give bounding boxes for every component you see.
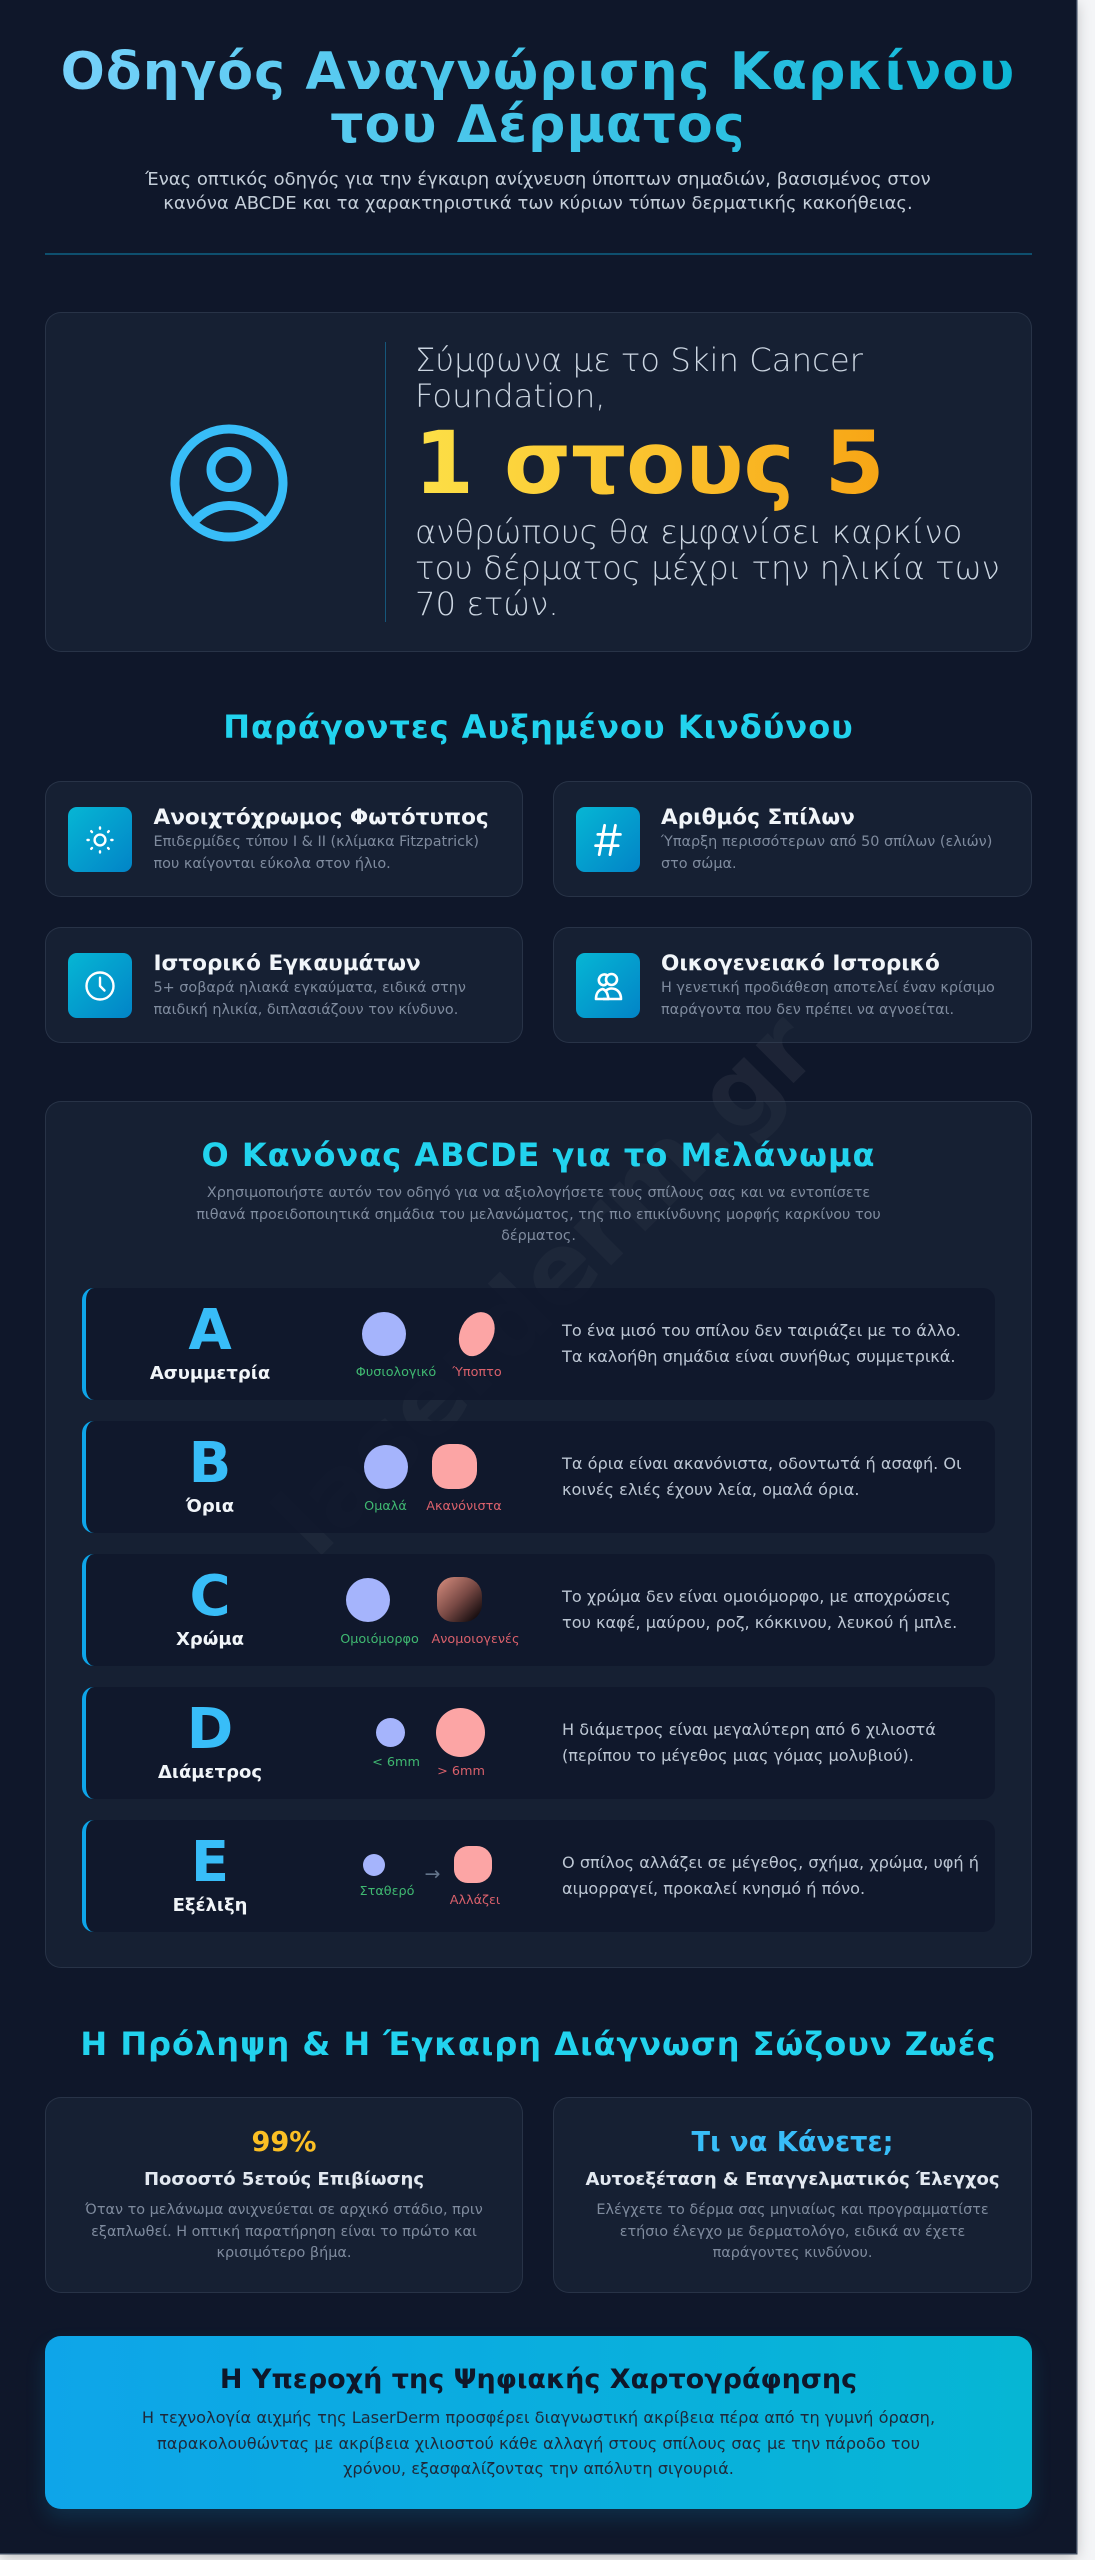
description: Τα καλοήθη σημάδια είναι συνήθως συμμετρικά. [562, 1347, 956, 1366]
hero number: 1 στους 5 [414, 414, 885, 514]
row: B border [82, 1421, 994, 1533]
title [0, 46, 1076, 152]
card title: Ανοιχτόχρωμος Φωτότυπος [154, 805, 489, 830]
card text: ετήσιο έλεγχο με δερματολόγο, ειδικά αν έχετε [620, 2224, 965, 2240]
card text [660, 834, 992, 872]
callout title: Η Υπεροχή της Ψηφιακής Χαρτογράφησης [220, 2364, 857, 2395]
subtitle: Ένας οπτικός οδηγός για την έγκαιρη ανίχνευση ύποπτων σημαδιών, βασισμένος στον [145, 169, 931, 190]
legend irregular: Ακανόνιστα [426, 1499, 502, 1514]
hero closing text: του δέρματος μέχρι την ηλικία των [415, 549, 1000, 587]
label: Χρώμα [176, 1629, 244, 1650]
normal mole [362, 1312, 406, 1356]
letter B: B [189, 1431, 231, 1496]
description [562, 1853, 979, 1898]
legend changing: Αλλάζει [450, 1893, 500, 1908]
changing mole [454, 1846, 492, 1883]
heading: ABCDE: Ο Κανόνας ABCDE για το Μελάνωμα [202, 1136, 875, 1174]
icon: people [576, 953, 640, 1018]
card text: Η γενετική προδιάθεση αποτελεί έναν κρίσιμο [661, 980, 995, 996]
description [562, 1720, 936, 1765]
description: Το χρώμα δεν είναι ομοιόμορφο, με αποχρώσεις [562, 1587, 951, 1606]
card text [85, 2202, 483, 2261]
title: του Δέρματος [330, 94, 746, 154]
row: A asymmetry [82, 1288, 994, 1400]
panel: risk card moles [553, 781, 1032, 897]
letter C: C [189, 1564, 231, 1629]
hero intro text: Foundation, [415, 377, 606, 415]
uniform mole [346, 1578, 390, 1622]
asymmetric mole [451, 1306, 502, 1361]
card text: κρισιμότερο βήμα. [217, 2245, 351, 2261]
ABCDE intro text [196, 1185, 881, 1244]
callout text: Η τεχνολογία αιχμής της LaserDerm προσφέρει διαγνωστική ακρίβεια πέρα από τη γυμνή όραση, [142, 2408, 935, 2427]
card title: Αριθμός Σπίλων [661, 805, 855, 830]
panel: ABCDE rule [45, 1101, 1032, 1968]
hero closing text: 70 ετών. [415, 585, 559, 623]
description [562, 1321, 961, 1366]
card text: παράγοντα που δεν πρέπει να αγνοείται. [661, 1002, 954, 1018]
callout text: παρακολουθώντας με ακρίβεια χιλιοστού κάθε αλλαγή στους σπίλους σας με την πάροδο του [157, 2434, 920, 2453]
description: του καφέ, μαύρου, ροζ, κόκκινου, λευκού ή μπλε. [562, 1613, 957, 1632]
card text [661, 980, 995, 1018]
letter D: D [187, 1697, 233, 1762]
letter A: A [188, 1298, 232, 1363]
ABCDE intro text: δέρματος. [501, 1228, 576, 1244]
hero intro text: Σύμφωνα με το Skin Cancer [415, 341, 863, 379]
panel: hero statistic [45, 312, 1032, 652]
row: E evolution [82, 1820, 994, 1932]
card text: Επιδερμίδες τύπου I & II (κλίμακα Fitzpatrick) [154, 834, 479, 850]
panel: risk card burns [45, 927, 523, 1043]
callout text [142, 2408, 935, 2478]
card text: στο σώμα. [661, 856, 737, 872]
letter E: E [191, 1830, 229, 1895]
label: Όρια [186, 1496, 234, 1517]
legend small: < 6mm [372, 1755, 420, 1770]
irregular mole [432, 1444, 477, 1489]
description: Τα όρια είναι ακανόνιστα, οδοντωτά ή ασαφή. Οι [562, 1454, 962, 1473]
description: Ο σπίλος αλλάζει σε μέγεθος, σχήμα, χρώμα, υφή ή [562, 1853, 979, 1872]
description: (περίπου το μέγεθος μιας γόμας μολυβιού). [562, 1746, 914, 1765]
subtitle: κανόνα ABCDE και τα χαρακτηριστικά των κύριων τύπων δερματικής κακοήθειας. [163, 193, 913, 214]
card text [596, 2202, 989, 2261]
callout text: χρόνου, εξασφαλίζοντας την απόλυτη σιγουριά. [343, 2459, 734, 2478]
label: Εξέλιξη [173, 1895, 247, 1916]
icon: person in circle [170, 424, 288, 542]
arrow: → [425, 1863, 440, 1885]
card title: Οικογενειακό Ιστορικό [661, 951, 940, 976]
ABCDE intro text: πιθανά προειδοποιητικά σημάδια του μελανώματος, της πιο επικίνδυνης μορφής καρκίνου του [196, 1207, 881, 1223]
card heading: Τι να Κάνετε; [691, 2127, 894, 2158]
small mole [376, 1718, 405, 1747]
icon: sun [68, 807, 132, 872]
card text: εξαπλωθεί. Η οπτική παρατήρηση είναι το πρώτο και [91, 2224, 477, 2240]
panel: survival rate [45, 2097, 523, 2293]
panel: risk card family [553, 927, 1032, 1043]
subtitle [145, 169, 931, 214]
panel: risk card skin type [45, 781, 523, 897]
card text: 5+ σοβαρά ηλιακά εγκαύματα, ειδικά στην [154, 980, 466, 996]
legend stable: Σταθερό [360, 1884, 414, 1899]
heading: prevention: Η Πρόληψη & Η Έγκαιρη Διάγνωση Σώζουν Ζωές [80, 2025, 997, 2063]
description: αιμορραγεί, προκαλεί κνησμό ή πόνο. [562, 1879, 865, 1898]
description: Το ένα μισό του σπίλου δεν ταιριάζει με το άλλο. [562, 1321, 961, 1340]
card text: Όταν το μελάνωμα ανιχνεύεται σε αρχικό στάδιο, πριν [85, 2202, 483, 2218]
hero intro text [415, 341, 863, 415]
stat: 99% [251, 2127, 317, 2158]
stable mole [363, 1854, 385, 1876]
legend varied: Ανομοιογενές [432, 1632, 519, 1647]
card text: παιδική ηλικία, διπλασιάζουν τον κίνδυνο. [154, 1002, 458, 1018]
label: Ασυμμετρία [150, 1363, 270, 1384]
icon: clock [68, 953, 132, 1018]
ABCDE intro text: Χρησιμοποιήστε αυτόν τον οδηγό για να αξιολογήσετε τους σπίλους σας και να εντοπίσετε [207, 1185, 870, 1201]
card text: Ύπαρξη περισσότερων από 50 σπίλων (ελιών) [661, 834, 992, 850]
smooth mole [364, 1445, 408, 1489]
panel: what to do [553, 2097, 1032, 2293]
legend suspect: Ύποπτο [452, 1365, 502, 1380]
label: Διάμετρος [158, 1762, 262, 1783]
description [562, 1454, 962, 1499]
description: Η διάμετρος είναι μεγαλύτερη από 6 χιλιοστά [562, 1720, 936, 1739]
icon: hash [576, 807, 640, 872]
callout: digital mapping [45, 2336, 1032, 2509]
multicolour mole [437, 1577, 482, 1622]
legend large: > 6mm [437, 1764, 485, 1779]
card title: Ιστορικό Εγκαυμάτων [154, 951, 421, 976]
card text [154, 834, 479, 872]
description [562, 1587, 957, 1632]
legend smooth: Ομαλά [364, 1499, 407, 1514]
description: κοινές ελιές έχουν λεία, ομαλά όρια. [562, 1480, 859, 1499]
row: C colour [82, 1554, 994, 1666]
card text: παράγοντες κινδύνου. [713, 2245, 872, 2261]
large mole [436, 1708, 485, 1757]
row: D diameter [82, 1687, 994, 1799]
card text [154, 980, 466, 1018]
legend normal: Φυσιολογικό [356, 1365, 436, 1380]
watermark: laserderm.gr [252, 991, 839, 1578]
card title: Ποσοστό 5ετούς Επιβίωσης [144, 2169, 424, 2190]
hero closing text [415, 513, 1000, 623]
hero closing text: ανθρώπους θα εμφανίσει καρκίνο [415, 513, 962, 551]
card title: Αυτοεξέταση & Επαγγελματικός Έλεγχος [585, 2169, 1000, 2190]
title: Οδηγός Αναγνώρισης Καρκίνου [61, 42, 1015, 102]
card text: που καίγονται εύκολα στον ήλιο. [154, 856, 391, 872]
heading: risk factors: Παράγοντες Αυξημένου Κινδύνου [223, 708, 854, 746]
legend uniform: Ομοιόμορφο [340, 1632, 419, 1647]
card text: Ελέγχετε το δέρμα σας μηνιαίως και προγραμματίστε [596, 2202, 989, 2218]
